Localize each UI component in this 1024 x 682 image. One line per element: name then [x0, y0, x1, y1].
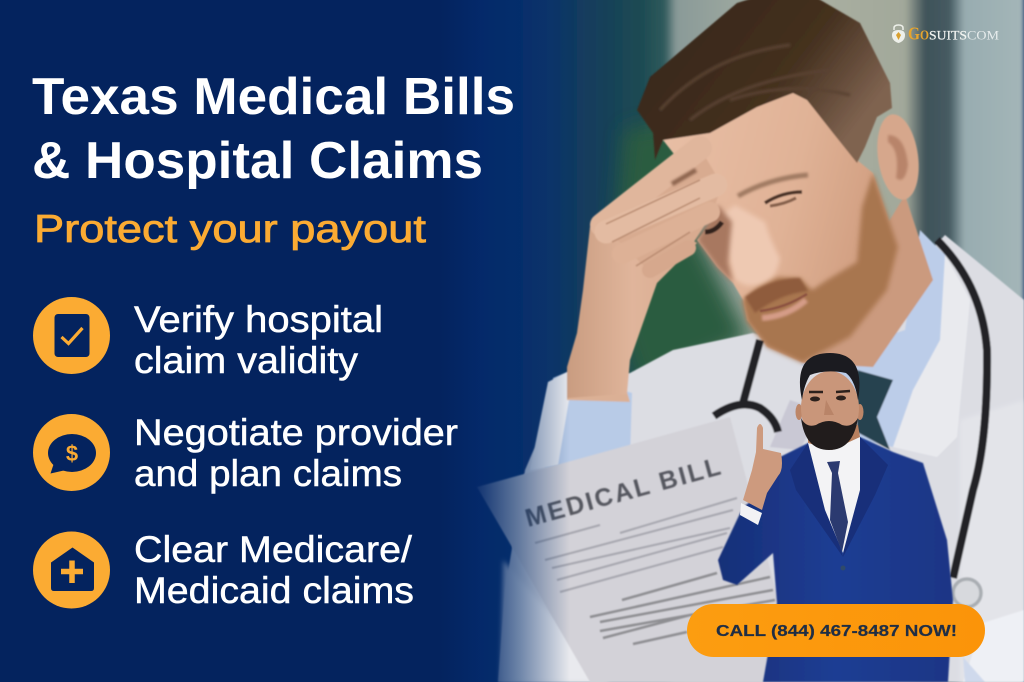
raised hand [743, 424, 782, 510]
hair [800, 353, 859, 400]
main title [32, 68, 515, 190]
eyebrow and eyes [738, 175, 808, 196]
beard [742, 173, 898, 363]
icon: house with plus [33, 532, 110, 608]
item text: claim validity [134, 340, 359, 381]
doctor in white coat [498, 0, 1024, 682]
mouth [760, 294, 807, 311]
photo background [430, 0, 1024, 682]
nose [824, 400, 834, 415]
lapels [790, 443, 843, 557]
shirt and tie [800, 230, 950, 447]
cuff [740, 503, 762, 525]
wordmark: O [920, 28, 929, 44]
shirt cuff [545, 372, 632, 468]
call to action button: CALL (844) 467-8487 NOW! [716, 623, 957, 640]
stethoscope [714, 240, 987, 607]
item: negotiate claims [33, 412, 458, 494]
item text: Negotiate provider [134, 412, 458, 453]
hair highlights [660, 45, 850, 120]
medical bill paper [477, 417, 800, 682]
main title: Texas Medical Bills [32, 68, 515, 126]
wordmark: COM [967, 28, 999, 42]
neck [803, 195, 933, 367]
nose highlight [722, 205, 780, 286]
mustache [745, 278, 808, 313]
attorney portrait [718, 353, 953, 682]
main title: & Hospital Claims [32, 132, 483, 190]
jacket button [840, 566, 846, 570]
item text: and plan claims [134, 453, 402, 494]
beard [801, 418, 858, 450]
wordmark [908, 24, 999, 44]
bill title: MEDICAL BILL [522, 453, 724, 533]
item text: Clear Medicare/ [134, 529, 413, 570]
item: clear Medicare/Medicaid [33, 529, 414, 611]
hair [637, 0, 892, 163]
wordmark: G [908, 24, 920, 44]
icon: padlock [892, 25, 905, 43]
left coat lapel [770, 400, 820, 450]
suit [718, 437, 953, 682]
neck [808, 425, 860, 450]
item: verify claim validity [33, 297, 383, 381]
navy fade overlay [0, 0, 570, 682]
hand [567, 148, 722, 398]
blurred bill text lines [535, 498, 775, 644]
head [801, 371, 859, 445]
icon: speech bubble with dollar [33, 414, 110, 491]
hand shadow on face [697, 205, 733, 283]
call to action button [687, 604, 985, 657]
ear [872, 112, 924, 202]
subtitle: Protect your payout [34, 208, 426, 251]
item text [134, 412, 458, 494]
ears [796, 404, 802, 420]
face [663, 92, 898, 363]
right lapel [893, 255, 970, 457]
wordmark: SUITS [929, 28, 967, 42]
eyes [809, 391, 850, 392]
white coat [498, 235, 1024, 682]
logo [892, 24, 999, 44]
tie [827, 461, 848, 552]
item text: Verify hospital [134, 299, 383, 340]
white shirt [808, 437, 860, 553]
item text [134, 299, 383, 381]
item text [134, 529, 414, 611]
item text: Medicaid claims [134, 570, 414, 611]
finger creases [606, 180, 700, 266]
coat under paper [500, 560, 610, 682]
icon: speech bubble with dollar: $ [66, 441, 78, 466]
icon: document with checkmark [33, 297, 110, 374]
